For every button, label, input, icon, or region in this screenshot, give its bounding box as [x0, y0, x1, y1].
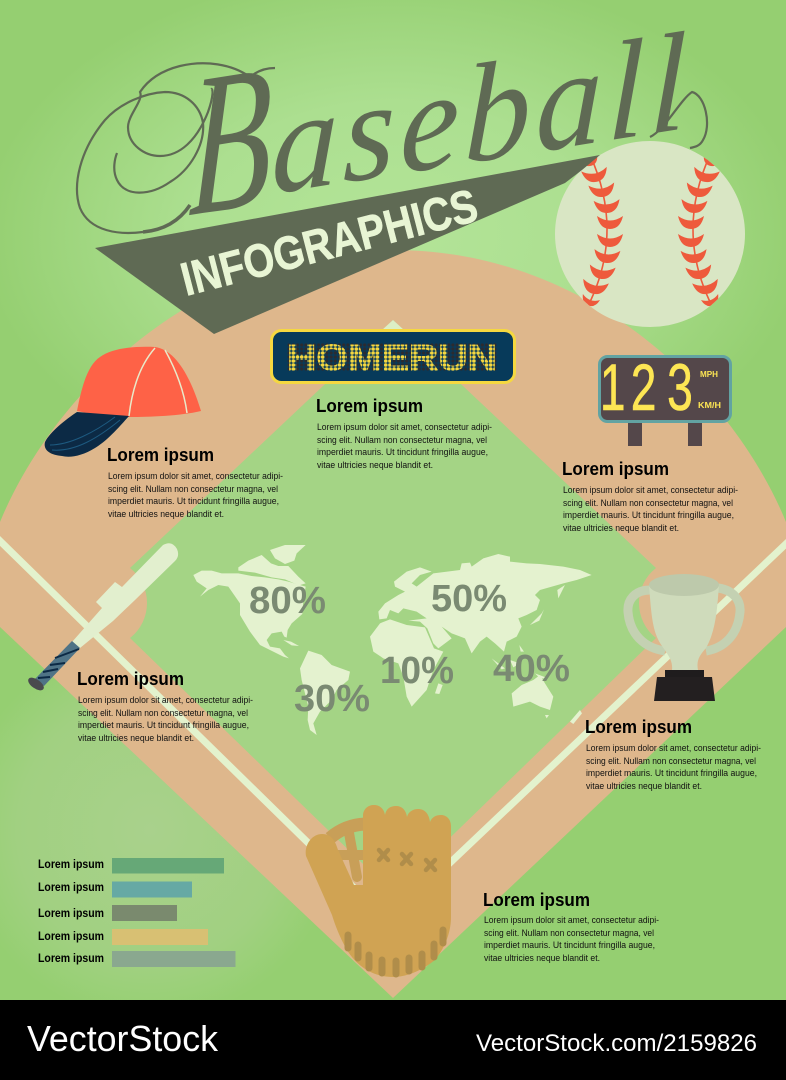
- stat 80%: 80%: [249, 580, 326, 622]
- title: Baseball: B: [187, 21, 274, 260]
- world map: [193, 545, 592, 735]
- baseball: [555, 141, 745, 327]
- text block: homerun: Lorem ipsum dolor sit amet, consectetur adipi-: [317, 422, 492, 433]
- text block: speed: [562, 458, 738, 534]
- text block: homerun: scing elit. Nullam non consectetur magna, vel: [317, 435, 487, 446]
- bar chart: Lorem ipsum: [38, 931, 104, 943]
- bar chart: Lorem ipsum: [38, 859, 104, 871]
- title: Baseball: aseball: [270, 2, 693, 225]
- stat 10%: 10%: [380, 650, 454, 692]
- text block: cap: [107, 444, 283, 520]
- text block: bat: [77, 668, 253, 744]
- text block: bat: scing elit. Nullam non consectetur magna, vel: [78, 708, 248, 719]
- foul line left: [0, 537, 395, 928]
- text block: bat: Lorem ipsum: [77, 668, 184, 689]
- icon: trophy: [628, 574, 740, 701]
- foul line right: [393, 540, 786, 917]
- text block: speed: vitae ultricies neque blandit et.: [563, 523, 679, 534]
- footer bar: [0, 1000, 786, 1080]
- text block: speed: scing elit. Nullam non consectetur magna, vel: [563, 498, 733, 509]
- stat 40%: 40%: [493, 648, 570, 690]
- text block: glove: Lorem ipsum dolor sit amet, consectetur adipi-: [484, 915, 659, 926]
- bar chart: [38, 858, 236, 967]
- unit MPH: MPH: [700, 370, 718, 379]
- text block: glove: imperdiet mauris. Ut tincidunt fringilla augue,: [484, 940, 655, 951]
- text block: speed: Lorem ipsum: [562, 458, 669, 479]
- text block: cap: Lorem ipsum dolor sit amet, consectetur adipi-: [108, 471, 283, 482]
- text block: homerun: imperdiet mauris. Ut tincidunt fringilla augue,: [317, 447, 488, 458]
- text block: bat: vitae ultricies neque blandit et.: [78, 733, 194, 744]
- text block: trophy: Lorem ipsum: [585, 716, 692, 737]
- text block: cap: Lorem ipsum: [107, 444, 214, 465]
- text block: glove: Lorem ipsum: [483, 889, 590, 910]
- text block: cap: scing elit. Nullam non consectetur magna, vel: [108, 484, 278, 495]
- text block: speed: Lorem ipsum dolor sit amet, consectetur adipi-: [563, 485, 738, 496]
- homerun scoreboard: [272, 330, 514, 382]
- pennant banner: [95, 155, 600, 334]
- text block: bat: imperdiet mauris. Ut tincidunt fringilla augue,: [78, 720, 249, 731]
- footer logo: VectorStock: [27, 1018, 219, 1059]
- stat 30%: 30%: [294, 678, 370, 720]
- text block: trophy: [585, 716, 761, 792]
- footer url: VectorStock.com/2159826: [476, 1030, 757, 1057]
- icon: speed board: [600, 351, 730, 446]
- home plate marker: [382, 320, 404, 330]
- bar chart: Lorem ipsum: [38, 882, 104, 894]
- background glow lower left: [0, 640, 340, 1000]
- banner text: INFOGRAPHICS: [175, 178, 483, 306]
- bar chart: Lorem ipsum: [38, 953, 104, 965]
- icon: bat: [26, 543, 178, 693]
- text block: trophy: scing elit. Nullam non consectetur magna, vel: [586, 756, 756, 767]
- text block: trophy: vitae ultricies neque blandit et.: [586, 781, 702, 792]
- text block: cap: vitae ultricies neque blandit et.: [108, 509, 224, 520]
- text block: speed: imperdiet mauris. Ut tincidunt fringilla augue,: [563, 510, 734, 521]
- text block: bat: Lorem ipsum dolor sit amet, consectetur adipi-: [78, 695, 253, 706]
- text block: glove: [483, 889, 659, 964]
- text block: cap: imperdiet mauris. Ut tincidunt fringilla augue,: [108, 496, 279, 507]
- speed digits: 123: [600, 351, 693, 425]
- text block: homerun: vitae ultricies neque blandit et.: [317, 460, 433, 471]
- title: Baseball: [77, 0, 707, 260]
- text block: homerun: Lorem ipsum: [316, 395, 423, 416]
- stat 50%: 50%: [431, 578, 507, 620]
- text block: glove: vitae ultricies neque blandit et.: [484, 953, 600, 964]
- icon: glove: [306, 805, 451, 977]
- inner grass diamond: [130, 320, 656, 893]
- infield dirt: [0, 250, 786, 998]
- background: top light: [0, 0, 786, 520]
- homerun scoreboard: HOMERUN: [287, 337, 497, 378]
- text block: trophy: Lorem ipsum dolor sit amet, consectetur adipi-: [586, 743, 761, 754]
- unit KM/H: KM/H: [698, 401, 721, 410]
- text block: trophy: imperdiet mauris. Ut tincidunt fringilla augue,: [586, 768, 757, 779]
- text block: glove: scing elit. Nullam non consectetur magna, vel: [484, 928, 654, 939]
- text block: homerun: [316, 395, 492, 471]
- bar chart: Lorem ipsum: [38, 908, 104, 920]
- icon: cap: [45, 347, 201, 457]
